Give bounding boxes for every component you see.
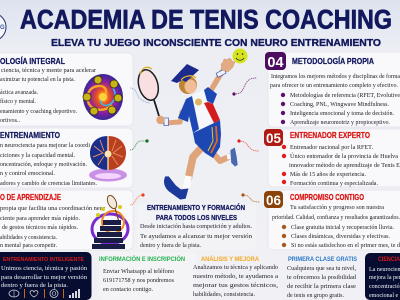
connector: player to 05 (237, 139, 259, 151)
bullet list: innovador método de aprendizaje de Tenis E (289, 163, 400, 169)
text block: de gestos técnicos más rápidos. (2, 225, 78, 231)
panel 04: metodología propia (265, 52, 400, 127)
text block: ortivos.. (0, 118, 21, 124)
heading: ENTRENADOR EXPERTO (290, 130, 370, 140)
wristband and hand (156, 116, 168, 126)
logo badge (0, 13, 6, 41)
tennis ball (232, 48, 248, 64)
subtitle: ELEVA TU JUEGO INCONSCIENTE CON NEURO ENTRENAMIENTO (51, 38, 381, 49)
connector: player to 04 (232, 78, 257, 96)
text block (287, 266, 357, 299)
raised arm (210, 68, 225, 92)
text block: Tu satisfacción y progreso son nuestra (290, 204, 384, 211)
text block (140, 224, 253, 249)
bullet list: Clases dinámicas, diversidas y efectivas. (291, 233, 391, 240)
bullet list (282, 225, 400, 249)
connector: swirl to player (130, 88, 150, 103)
text block: dentro y fuera de la pista. (140, 242, 201, 249)
icon: stairs with racket (92, 194, 128, 249)
panel: información e inscripción (99, 252, 196, 300)
left arm (165, 112, 182, 123)
text block: ciente para aprender más rápido. (0, 216, 80, 222)
heading: ENTRENAMIENTO (0, 130, 60, 140)
shirt sleeve (204, 87, 217, 104)
text block (1, 266, 87, 289)
bullet list: Coaching, PNL, Wingwave Mindfulness. (290, 101, 389, 108)
text block (369, 267, 400, 299)
heading: COMPROMISO CONTIGO (290, 192, 364, 202)
panel: proceso de aprendizaje (0, 190, 133, 250)
shirt blue stripe (178, 96, 199, 133)
text block: nuestro método, te ayudamos a (193, 274, 278, 280)
text block: n neurociencia para mejorar la coordi (0, 143, 90, 149)
head (179, 76, 197, 94)
text block: de recibir la primera clase (287, 284, 356, 290)
number badge (264, 191, 283, 208)
text block: oncentración, enfoque y motivación. (0, 161, 87, 168)
front shoe (164, 176, 189, 200)
text block: ciciones y la capacidad mental. (0, 153, 75, 159)
panel: metodología integral (0, 53, 133, 126)
connector: brain to player (130, 139, 149, 150)
text block: para desarrollar tu mejor versión (1, 275, 87, 281)
logo badge: G (0, 25, 5, 31)
text block: Integramos los mejores métodos y disciplinas de forma (271, 73, 400, 80)
text block: de tenis en grupo gratis. (287, 293, 344, 299)
text block: n y control emocional. (0, 171, 55, 177)
sock (186, 176, 188, 190)
heading: PARA TODOS LOS NIVELES (156, 213, 237, 222)
text block: habilidades, consistencia. (193, 292, 255, 298)
shirt red stripe (204, 102, 220, 123)
number badge: 06 (266, 193, 281, 208)
panel: entrenamiento inteligente (0, 252, 92, 300)
racket (135, 67, 161, 116)
panel: ciencia (365, 253, 400, 300)
heading (147, 203, 245, 222)
connector: stairs to player (130, 193, 145, 205)
shirt (178, 87, 220, 133)
icon row (9, 289, 80, 298)
bullet list (282, 145, 400, 187)
bullet list (281, 92, 400, 126)
back shoe (230, 147, 238, 167)
text block: físico y mental. (0, 98, 36, 105)
panel: análisis y mejora (193, 256, 279, 298)
heading: INFORMACIÓN E INSCRIPCIÓN (99, 255, 185, 263)
connector: player to 06 (241, 193, 260, 202)
heading: PRIMERA CLASE GRATIS (288, 257, 357, 263)
text block: áctica avanzada. (0, 90, 38, 96)
text block: Te ayudamos a alcanzar tu mejor versión (140, 234, 252, 240)
number badge (265, 52, 286, 71)
back sock (227, 156, 232, 157)
bullet list: Formación continua y especializada. (290, 181, 378, 187)
text block (0, 68, 96, 124)
heading: OLOGÍA INTEGRAL (0, 56, 65, 66)
bullet list: Clase gratuita inicial y recuperación lluvia. (291, 225, 394, 231)
text block (193, 265, 279, 298)
heading: ENTRENAMIENTO INTELIGENTE (3, 257, 84, 263)
bullet list: Metodologías de referencia (RFET, Evolutive (290, 92, 400, 99)
text block: te ofrecemos la posibilidad (287, 274, 356, 281)
bullet list: Si no estás satisfechoo en el primer mes, te d (291, 242, 400, 249)
number badge: 04 (267, 55, 284, 71)
text block: aximizar tu potencial en la pista. (0, 77, 75, 83)
wristband (216, 69, 226, 77)
text block (103, 268, 175, 293)
icon: swirl (83, 74, 123, 120)
text block: en contacto contigo. (103, 287, 154, 293)
illustration: tennis player (135, 48, 248, 200)
panel: entrenamiento (0, 128, 133, 188)
text block: propia que facilita una coordinación neur (0, 205, 105, 212)
text block: mejorar tus gestos técnicos, (193, 283, 279, 289)
text block (0, 143, 97, 187)
text block: Analizamos tu técnica y aplicando (193, 265, 278, 271)
heading: ENTRENAMIENTO Y FORMACIÓN (147, 203, 245, 212)
raised hand (221, 58, 235, 72)
text block: ciencia, técnica y mente para acelerar (1, 68, 96, 74)
panel 05: entrenador experto (264, 129, 400, 187)
text block (270, 73, 400, 89)
text block: emocional e (369, 293, 398, 299)
heading: ANÁLISIS Y MEJORA (201, 256, 260, 263)
panel 06: compromiso contigo (264, 190, 400, 250)
text block: 619171758 y nos pondremos (103, 278, 175, 284)
text block: adores y cambio de creencias limitantes. (0, 181, 97, 187)
heading: METODOLOGÍA PROPIA (292, 56, 374, 66)
bullet list: Más de 15 años de experiencia. (290, 172, 366, 178)
panel: primera clase gratis (287, 257, 357, 299)
text block: n mental para competir. (0, 243, 57, 249)
icon: brain (89, 136, 127, 182)
bullet list: Inteligencia emocional y toma de decisión. (290, 111, 395, 117)
heading: O DE APRENDIZAJE (0, 192, 61, 202)
text block: Desde iniciación hasta competición y adultos. (140, 224, 253, 230)
shorts (193, 120, 221, 158)
text block: enamiento y coaching deportivo. (0, 109, 77, 115)
text block (0, 205, 105, 249)
text block: Cualquiera que sea tu nivel, (287, 266, 357, 272)
panel: todos los niveles (137, 203, 256, 250)
text block: Enviar Whatsapp al teléfono (103, 268, 174, 275)
text block: dentro y fuera de la pista. (1, 282, 69, 289)
text block: Unimos ciencia, técnica y pasión (1, 266, 87, 272)
bullet list: Único entrenador de la provincia de Huelva (290, 152, 398, 160)
number badge (264, 129, 283, 146)
bullet list: Aprendizaje neuromotriz y propioceptivo. (290, 120, 390, 126)
bullet list: Entrenador nacional por la RFET. (290, 145, 374, 151)
graduation cap (171, 64, 199, 83)
front leg (188, 146, 203, 180)
number badge: 05 (266, 131, 281, 146)
text block: abilidades y consistencia. (0, 235, 57, 241)
text block (272, 204, 400, 221)
back leg (212, 152, 231, 161)
text block: para ofrecer te un entrenamiento completo y efectivo. (270, 82, 398, 89)
